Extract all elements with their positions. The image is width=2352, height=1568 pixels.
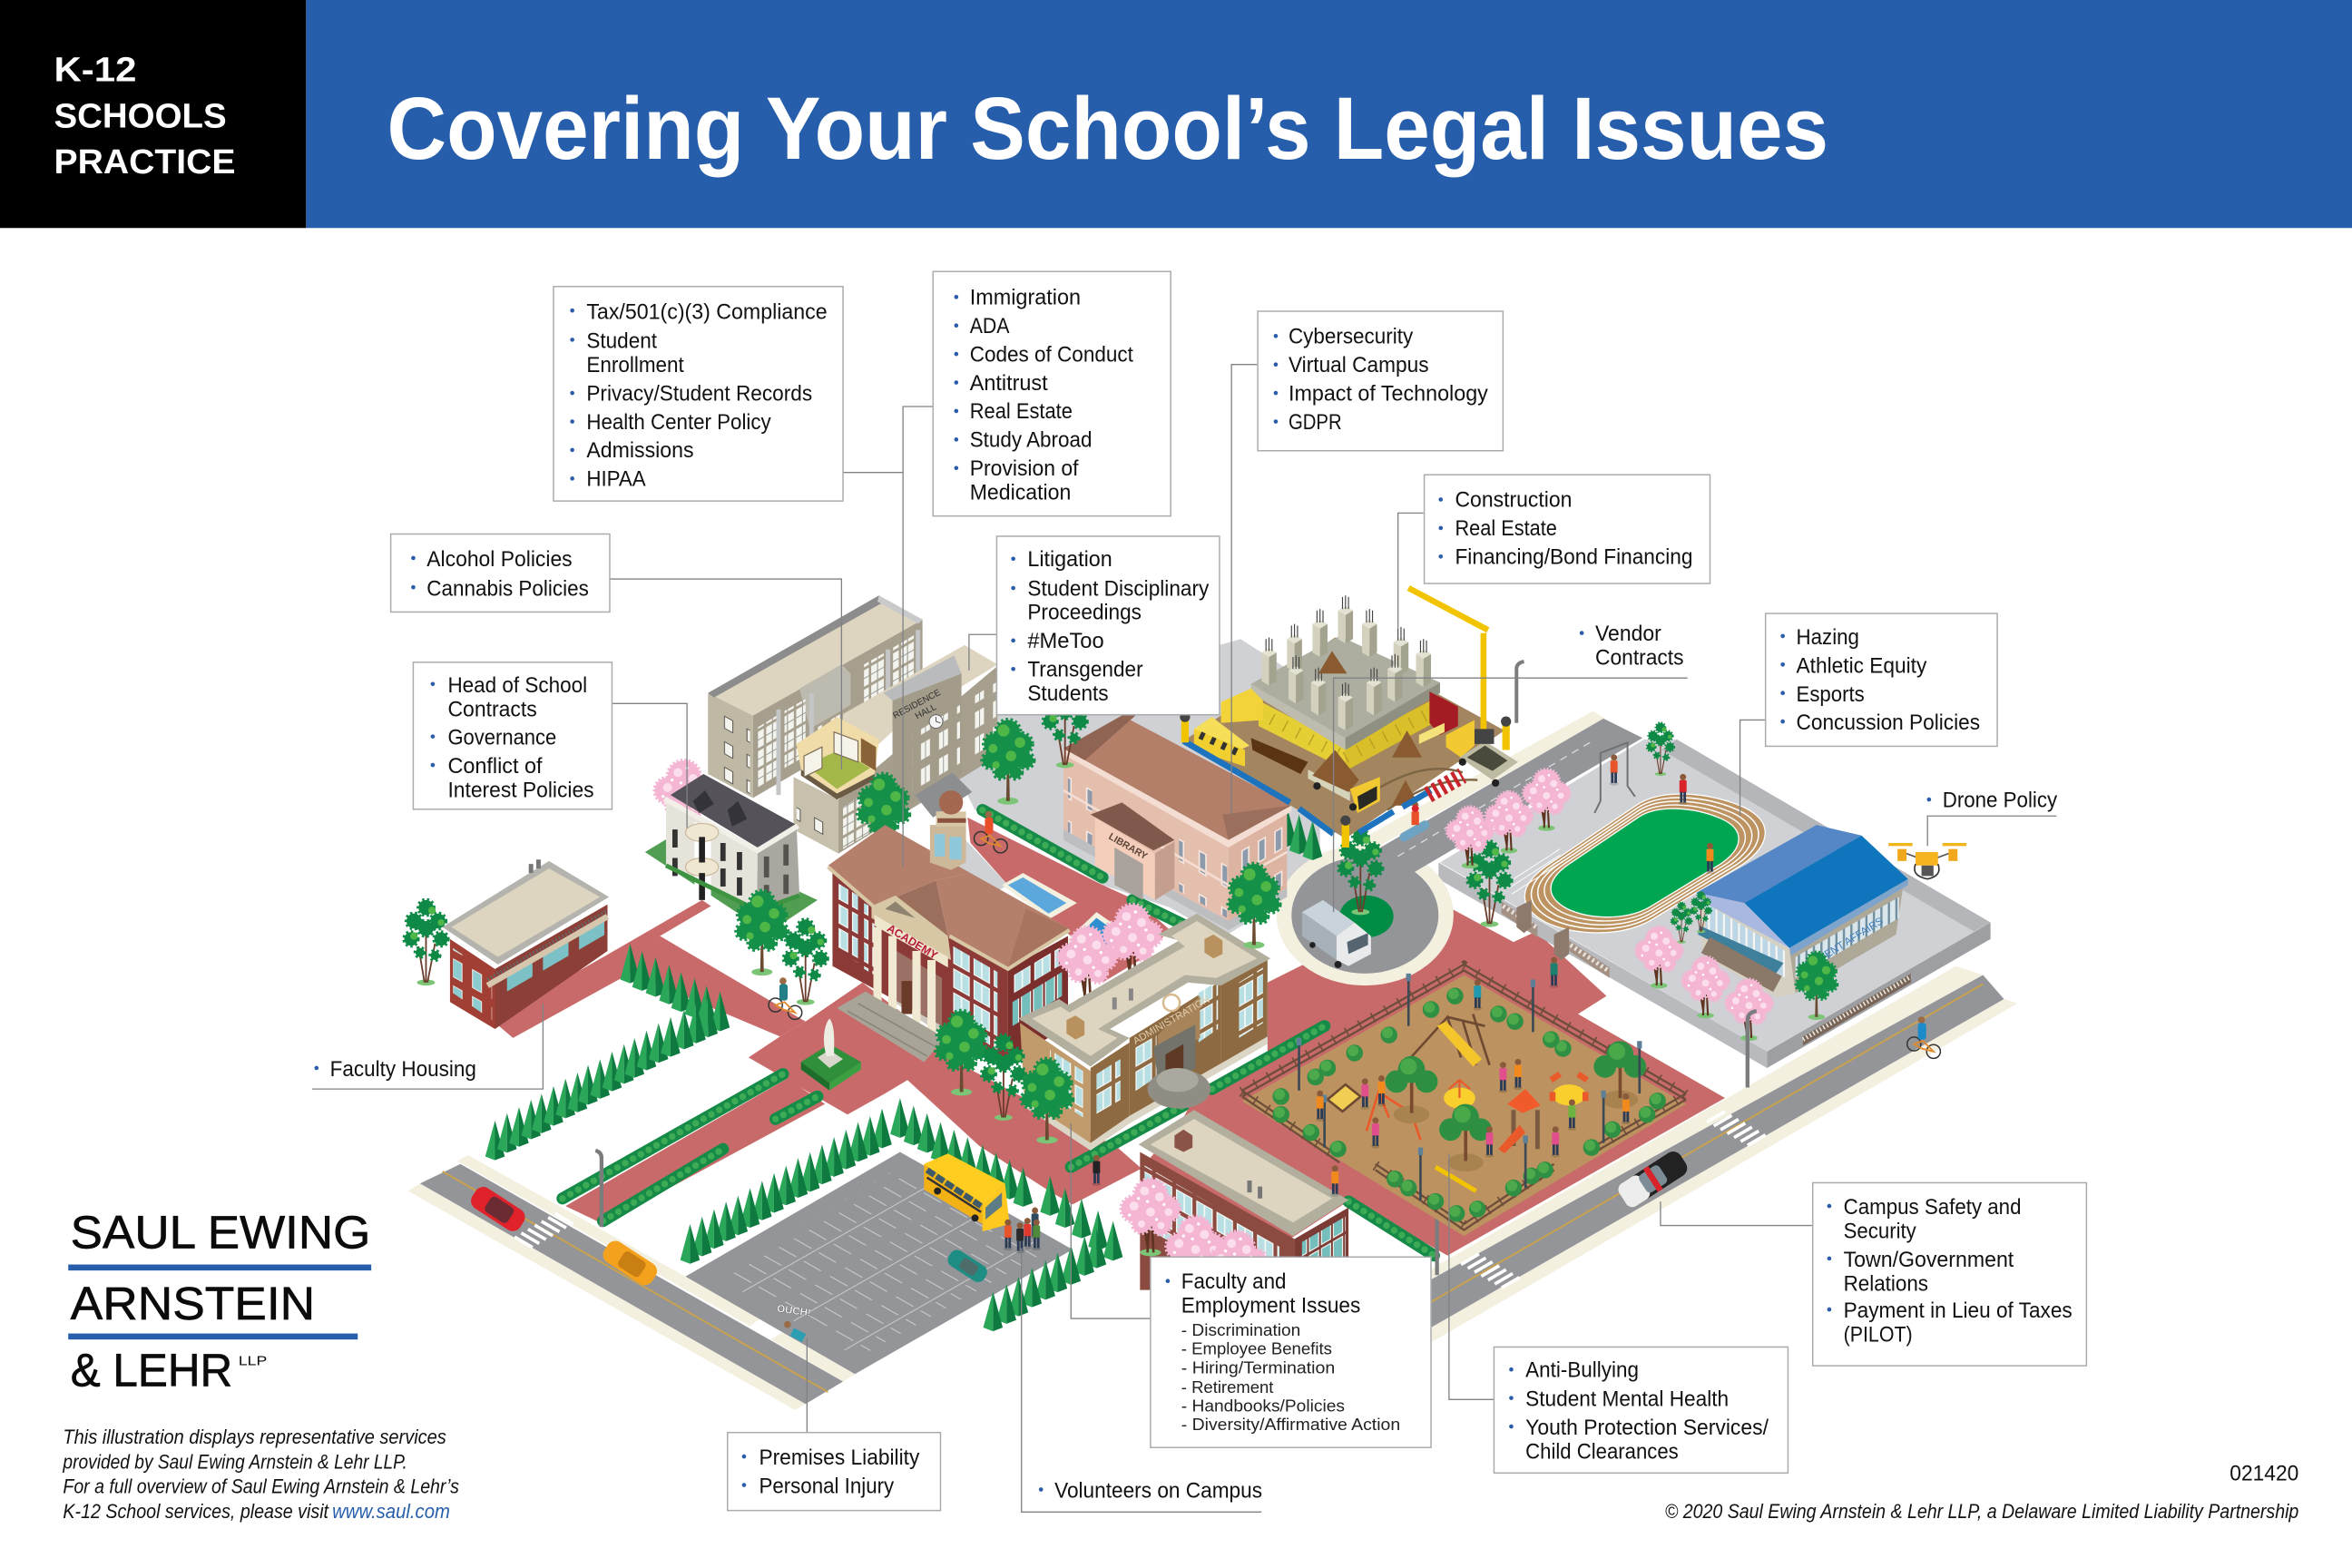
children and parents <box>1360 1078 1369 1110</box>
lower faculty building <box>1139 1110 1348 1305</box>
callout: tax and compliance: HIPAA <box>586 467 646 492</box>
callout: cybersecurity <box>1258 311 1503 451</box>
playground trees <box>1386 1056 1437 1123</box>
pink tree behind mansion <box>655 760 713 838</box>
library <box>1063 716 1291 930</box>
callout: campus safety: (PILOT) <box>1844 1323 1913 1348</box>
firm logo: ARNSTEIN <box>71 1278 315 1329</box>
library portico <box>1091 802 1174 900</box>
trees in front of administration <box>936 829 1382 1143</box>
statue <box>801 1018 861 1091</box>
callout: faculty and employment issues: - Discrimination <box>1181 1320 1300 1339</box>
grey plaza behind library <box>945 639 1320 937</box>
callout: campus safety: Town/Government <box>1844 1248 2014 1272</box>
callout: cybersecurity: Cybersecurity <box>1289 325 1414 349</box>
callout: faculty and employment issues: - Hiring/Termination <box>1181 1357 1335 1377</box>
callout: faculty and employment issues: - Handbooks/Policies <box>1181 1396 1345 1416</box>
callout: tax and compliance <box>554 287 843 501</box>
pink trees by pool <box>1058 905 1161 1004</box>
bushes <box>1272 987 1666 1222</box>
tree left of faculty housing <box>405 900 447 985</box>
callout: litigation: #MeToo <box>1027 629 1104 653</box>
callout: alcohol and cannabis: Alcohol Policies <box>426 547 573 572</box>
callout: immigration and conduct: Real Estate <box>970 399 1073 424</box>
callout: immigration and conduct: Antitrust <box>970 371 1048 396</box>
pull-up bars <box>1594 742 1635 813</box>
callout: litigation: Students <box>1027 681 1109 706</box>
playground <box>1242 965 1686 1236</box>
callout: construction: Construction <box>1455 488 1572 513</box>
parking lot <box>685 1152 1073 1374</box>
callout: head of school <box>413 662 612 809</box>
callout: immigration and conduct: ADA <box>970 314 1010 338</box>
callout: hazing and athletics: Athletic Equity <box>1797 653 1927 678</box>
callout: litigation: Litigation <box>1027 547 1112 572</box>
callout: cybersecurity: Virtual Campus <box>1289 353 1429 377</box>
callout: anti-bullying: Student Mental Health <box>1525 1387 1729 1412</box>
callout: faculty housing: Faculty Housing <box>330 1057 476 1082</box>
disclaimer: This illustration displays representative services <box>63 1426 446 1448</box>
scooter rider <box>1404 805 1425 837</box>
pools <box>1002 873 1131 972</box>
callout: immigration and conduct: Medication <box>970 480 1071 505</box>
callout: litigation: Transgender <box>1027 658 1143 682</box>
running track <box>1509 794 1765 933</box>
faculty housing <box>443 859 609 1029</box>
callout: anti-bullying: Anti-Bullying <box>1525 1358 1639 1383</box>
conifer rows <box>485 807 1322 1331</box>
climbing frame and slide <box>1406 1014 1489 1065</box>
callout: volunteers: Volunteers on Campus <box>1054 1479 1262 1504</box>
callout: hazing and athletics: Concussion Policies <box>1797 710 1980 735</box>
callout: tax and compliance: Privacy/Student Records <box>586 381 812 406</box>
callout: tax and compliance: Enrollment <box>586 353 684 377</box>
crane <box>1482 633 1485 732</box>
student affairs sign: STUDENT AFFAIRS <box>1798 916 1886 975</box>
library portico: LIBRARY <box>1106 831 1149 862</box>
residence hall: HALL <box>914 702 938 721</box>
callout: head of school: Conflict of <box>447 754 543 779</box>
residence hall <box>793 645 997 854</box>
practice label: SCHOOLS <box>54 98 227 136</box>
leader lines <box>312 365 2056 1512</box>
callout: hazing and athletics: Esports <box>1797 682 1865 707</box>
practice label: PRACTICE <box>54 143 236 181</box>
callout: cybersecurity: Impact of Technology <box>1289 381 1489 406</box>
administration sign: ADMINISTRATION <box>1132 995 1211 1047</box>
callout: faculty and employment issues: - Retirement <box>1181 1377 1273 1396</box>
callout: construction: Real Estate <box>1455 516 1557 541</box>
blue fence <box>1183 741 1431 834</box>
callout: immigration and conduct: Codes of Conduct <box>970 342 1133 367</box>
site trailers <box>1221 689 1263 723</box>
injured pedestrian <box>776 1304 811 1338</box>
cyclist lower right <box>1907 1016 1940 1058</box>
callout: campus safety <box>1813 1182 2086 1366</box>
callout: anti-bullying: Youth Protection Services/ <box>1525 1416 1769 1440</box>
academy sign: ACADEMY <box>885 922 941 962</box>
callout: head of school: Head of School <box>447 673 587 698</box>
tree group behind academy <box>858 682 1087 858</box>
merry-go-rounds <box>1444 1087 1475 1109</box>
drone <box>1888 845 1966 879</box>
swing set <box>1367 1092 1420 1140</box>
firm logo: SAUL EWING <box>71 1206 370 1258</box>
practice label: K-12 <box>54 51 136 89</box>
disclaimer: For a full overview of Saul Ewing Arnstein & Lehr’s <box>63 1475 459 1498</box>
callout: faculty and employment issues: - Employee Benefits <box>1181 1339 1332 1358</box>
people around campus <box>769 754 1714 1338</box>
student affairs building <box>1697 825 1908 997</box>
disclaimer: provided by Saul Ewing Arnstein & Lehr LLP. <box>63 1450 407 1473</box>
academy <box>828 790 1070 1062</box>
hedges <box>563 810 1434 1256</box>
callout: immigration and conduct <box>933 271 1171 516</box>
firm logo: LLP <box>239 1354 267 1368</box>
callout: vendor contracts: Vendor <box>1595 622 1661 646</box>
callout: vendor contracts: Contracts <box>1595 645 1684 670</box>
disclaimer <box>63 1426 459 1523</box>
callout: faculty and employment issues: - Diversity/Affirmative Action <box>1181 1415 1400 1434</box>
callout: tax and compliance: Student <box>586 329 657 354</box>
callout: premises liability <box>728 1433 940 1511</box>
school bus group <box>1004 1208 1041 1253</box>
practice label <box>0 0 306 228</box>
callout: construction <box>1425 475 1710 583</box>
callout: hazing and athletics: Hazing <box>1797 625 1859 650</box>
firm logo: & LEHR <box>71 1344 232 1396</box>
callout: premises liability: Premises Liability <box>759 1446 920 1470</box>
school bus <box>924 1153 1010 1231</box>
disclaimer: K-12 School services, please visit <box>63 1500 329 1523</box>
athletics trees and lamps <box>595 723 1837 1275</box>
callout: anti-bullying <box>1494 1347 1788 1473</box>
callout: campus safety: Payment in Lieu of Taxes <box>1844 1298 2073 1323</box>
callout: tax and compliance: Health Center Policy <box>586 410 772 435</box>
athletics platform <box>1438 740 1991 1068</box>
header band <box>0 0 2352 228</box>
construction site <box>1180 588 1524 848</box>
residence building one <box>708 595 923 798</box>
sandbox <box>1328 1084 1360 1112</box>
callout: faculty and employment issues <box>1151 1257 1431 1447</box>
callout: campus safety: Relations <box>1844 1271 1928 1296</box>
callout: immigration and conduct: Provision of <box>970 456 1079 481</box>
callout: premises liability: Personal Injury <box>759 1475 895 1499</box>
callout: litigation: Proceedings <box>1027 601 1142 625</box>
pink trees by lower building <box>1122 1179 1267 1308</box>
firm logo <box>68 1206 371 1396</box>
callout: immigration and conduct: Immigration <box>970 286 1081 310</box>
callout: litigation: Student Disciplinary <box>1027 576 1210 601</box>
callout: anti-bullying: Child Clearances <box>1525 1440 1679 1465</box>
bottom-left street <box>408 1155 855 1410</box>
gates and railings on platform <box>1502 900 1911 1045</box>
seesaw <box>1436 1167 1476 1191</box>
red walkways <box>492 818 1725 1256</box>
callout: cybersecurity: GDPR <box>1289 410 1342 435</box>
isometric campus illustration <box>405 588 2017 1410</box>
callout: campus safety: Campus Safety and <box>1844 1195 2021 1220</box>
right-hand street <box>1431 966 2017 1342</box>
concrete deck and sheet walls <box>1259 701 1346 771</box>
callout: alcohol and cannabis: Cannabis Policies <box>426 576 589 601</box>
cutaway dorm room <box>797 717 879 799</box>
callout: faculty and employment issues: Employment Issues <box>1181 1293 1360 1318</box>
fence <box>1242 965 1686 1230</box>
callout: head of school: Interest Policies <box>447 779 594 803</box>
injured pedestrian: OUCH! <box>776 1304 811 1319</box>
mansion <box>645 774 818 933</box>
callout: immigration and conduct: Study Abroad <box>970 428 1092 453</box>
callout: tax and compliance: Admissions <box>586 438 694 463</box>
callout: head of school: Contracts <box>447 697 537 721</box>
callout: litigation <box>996 536 1220 715</box>
trucks <box>1308 769 1350 801</box>
administration building <box>1018 914 1270 1151</box>
callout: drone policy: Drone Policy <box>1943 788 2058 812</box>
lamps <box>1406 974 1411 1026</box>
document code: 021420 <box>2230 1462 2298 1486</box>
teal car <box>945 1247 990 1285</box>
road vehicles <box>467 1016 1940 1289</box>
callout: vendor contracts <box>1580 622 1684 670</box>
playhouse <box>1498 1089 1541 1153</box>
callout: campus safety: Security <box>1844 1220 1917 1244</box>
orange taxi <box>600 1238 661 1289</box>
disclaimer: www.saul.com <box>332 1500 450 1523</box>
callout: construction: Financing/Bond Financing <box>1455 545 1692 570</box>
cupola <box>930 790 966 870</box>
residence hall sign: RESIDENCE <box>891 688 943 721</box>
delivery truck <box>1302 900 1371 968</box>
trees in front of academy <box>737 891 828 1005</box>
title: Covering Your School’s Legal Issues <box>387 79 1828 178</box>
callout: hazing and athletics <box>1766 613 1997 746</box>
callout: alcohol and cannabis <box>391 534 610 612</box>
police car <box>1615 1148 1690 1210</box>
callout: tax and compliance: Tax/501(c)(3) Compliance <box>586 299 828 324</box>
red car <box>467 1183 528 1235</box>
callout: faculty and employment issues: Faculty and <box>1181 1269 1286 1294</box>
upper road and roundabout <box>1277 711 1642 985</box>
callout: head of school: Governance <box>447 726 556 750</box>
entry canopy <box>915 772 972 818</box>
